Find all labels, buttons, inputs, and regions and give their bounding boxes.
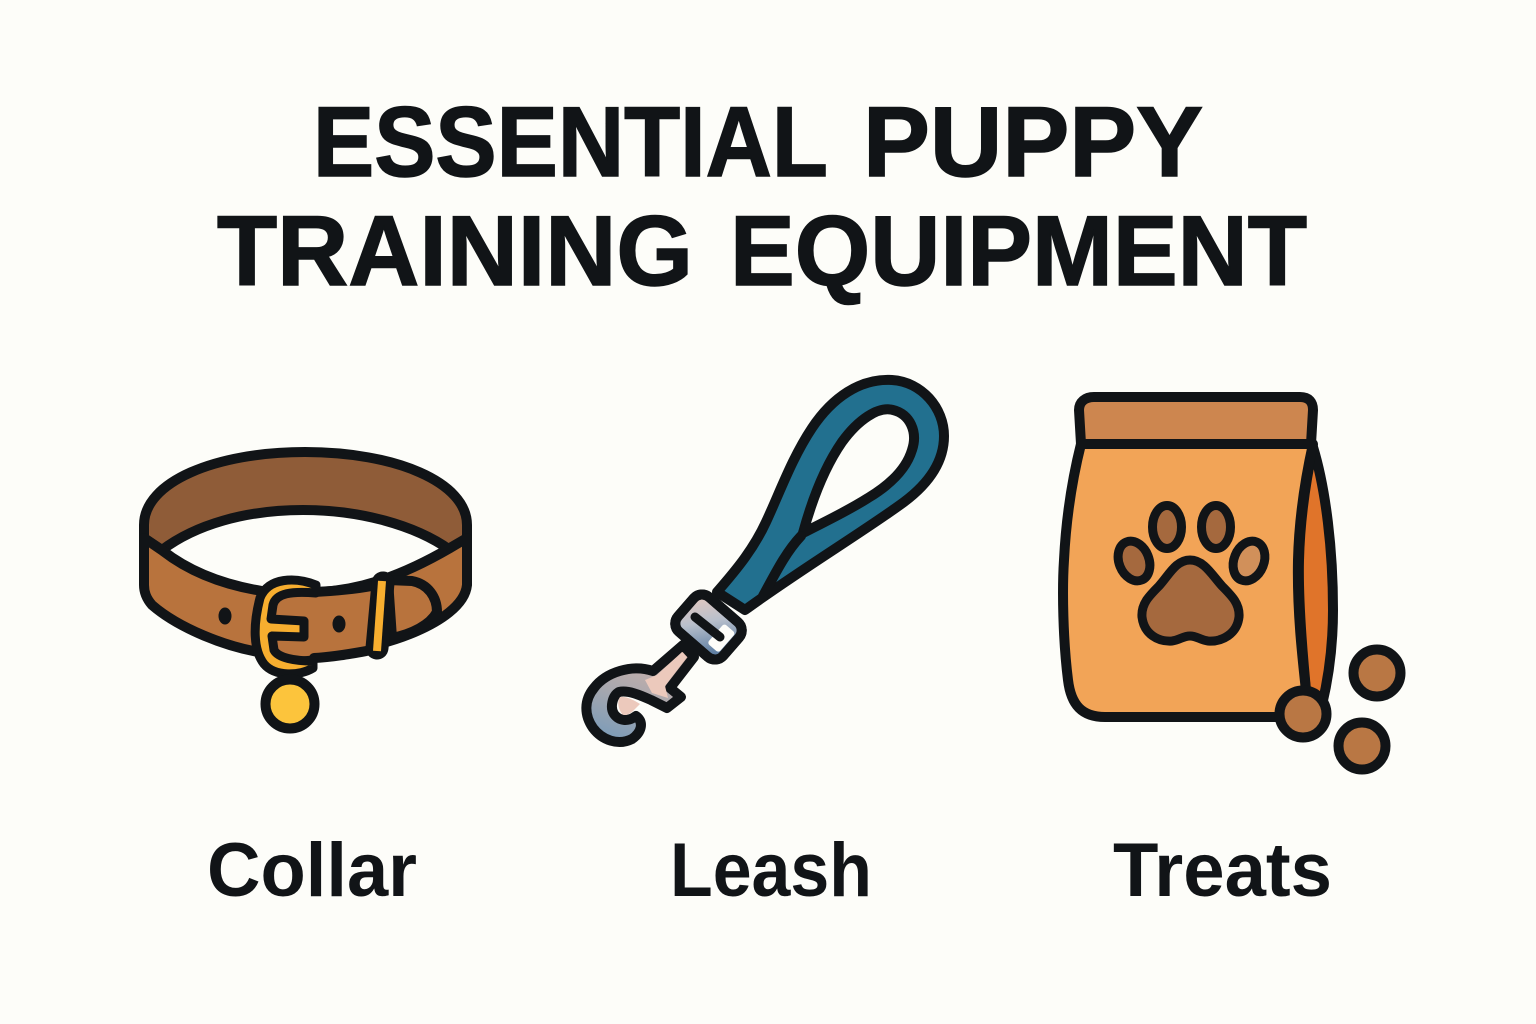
collar strap tip	[388, 580, 437, 638]
collar keeper	[377, 581, 383, 651]
title: ESSENTIAL	[313, 86, 828, 197]
kibble	[1280, 650, 1400, 770]
title: EQUIPMENT	[730, 195, 1307, 306]
label: collar: Collar	[207, 828, 417, 913]
leash connector ring	[671, 590, 746, 664]
icon: leash	[586, 380, 944, 742]
collar front band	[144, 538, 467, 655]
paw print	[1112, 506, 1271, 641]
icon: treats bag	[1063, 397, 1400, 770]
leash seam	[763, 536, 801, 596]
leash loop	[717, 380, 944, 610]
leash hook stem	[645, 652, 687, 698]
collar strap middle	[262, 585, 375, 660]
bag gusset	[1299, 447, 1333, 705]
bag front	[1063, 444, 1313, 717]
label: leash: Leash	[670, 828, 872, 913]
title	[217, 86, 1307, 306]
label: treats: Treats	[1113, 828, 1332, 913]
collar strap hole right	[332, 616, 346, 632]
bag top band	[1079, 397, 1313, 444]
title: TRAINING	[217, 195, 693, 306]
leash snap hook	[586, 645, 694, 742]
icon: collar	[144, 452, 467, 728]
collar buckle	[255, 580, 316, 674]
collar tag	[266, 680, 314, 728]
title: PUPPY	[863, 86, 1203, 197]
collar inner back band	[144, 452, 467, 550]
collar strap hole	[218, 608, 232, 624]
collar strap edges	[314, 586, 372, 658]
leash ring bar	[695, 617, 720, 637]
leash hook inner fill	[618, 697, 640, 715]
